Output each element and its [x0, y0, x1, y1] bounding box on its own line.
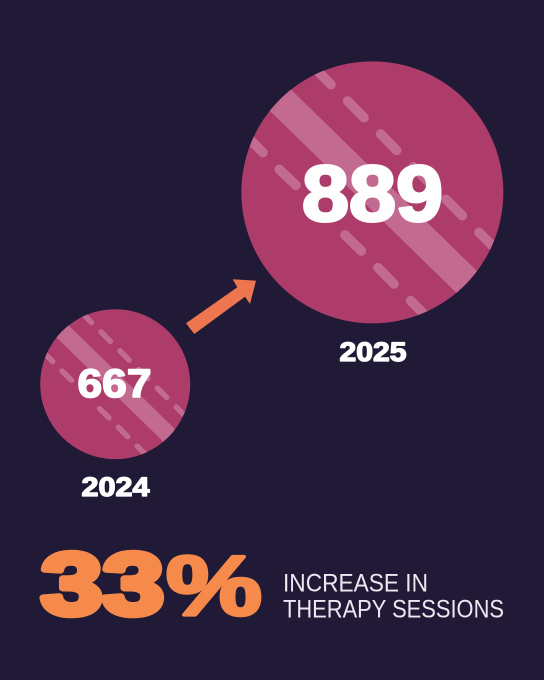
caption: increase in therapy sessions: INCREASE IN [283, 570, 428, 598]
stat: 33% [41, 536, 262, 633]
circle: 2024 cricket ball [40, 309, 190, 459]
caption: increase in therapy sessions: THERAPY SESSIONS [283, 596, 504, 624]
caption: increase in therapy sessions [283, 570, 504, 624]
circle: 2025 cricket ball [241, 61, 503, 323]
arrow: growth from 2024 to 2025 [186, 279, 256, 334]
infographic canvas [39, 61, 504, 618]
stat: 33%: 33 [41, 536, 164, 633]
stat: 33%: % [166, 539, 262, 633]
value: 889: 889 [302, 148, 443, 238]
year label: 2025: 2025 [340, 337, 406, 367]
year label: 2024: 2024 [82, 472, 150, 502]
value: 667: 667 [78, 362, 152, 406]
